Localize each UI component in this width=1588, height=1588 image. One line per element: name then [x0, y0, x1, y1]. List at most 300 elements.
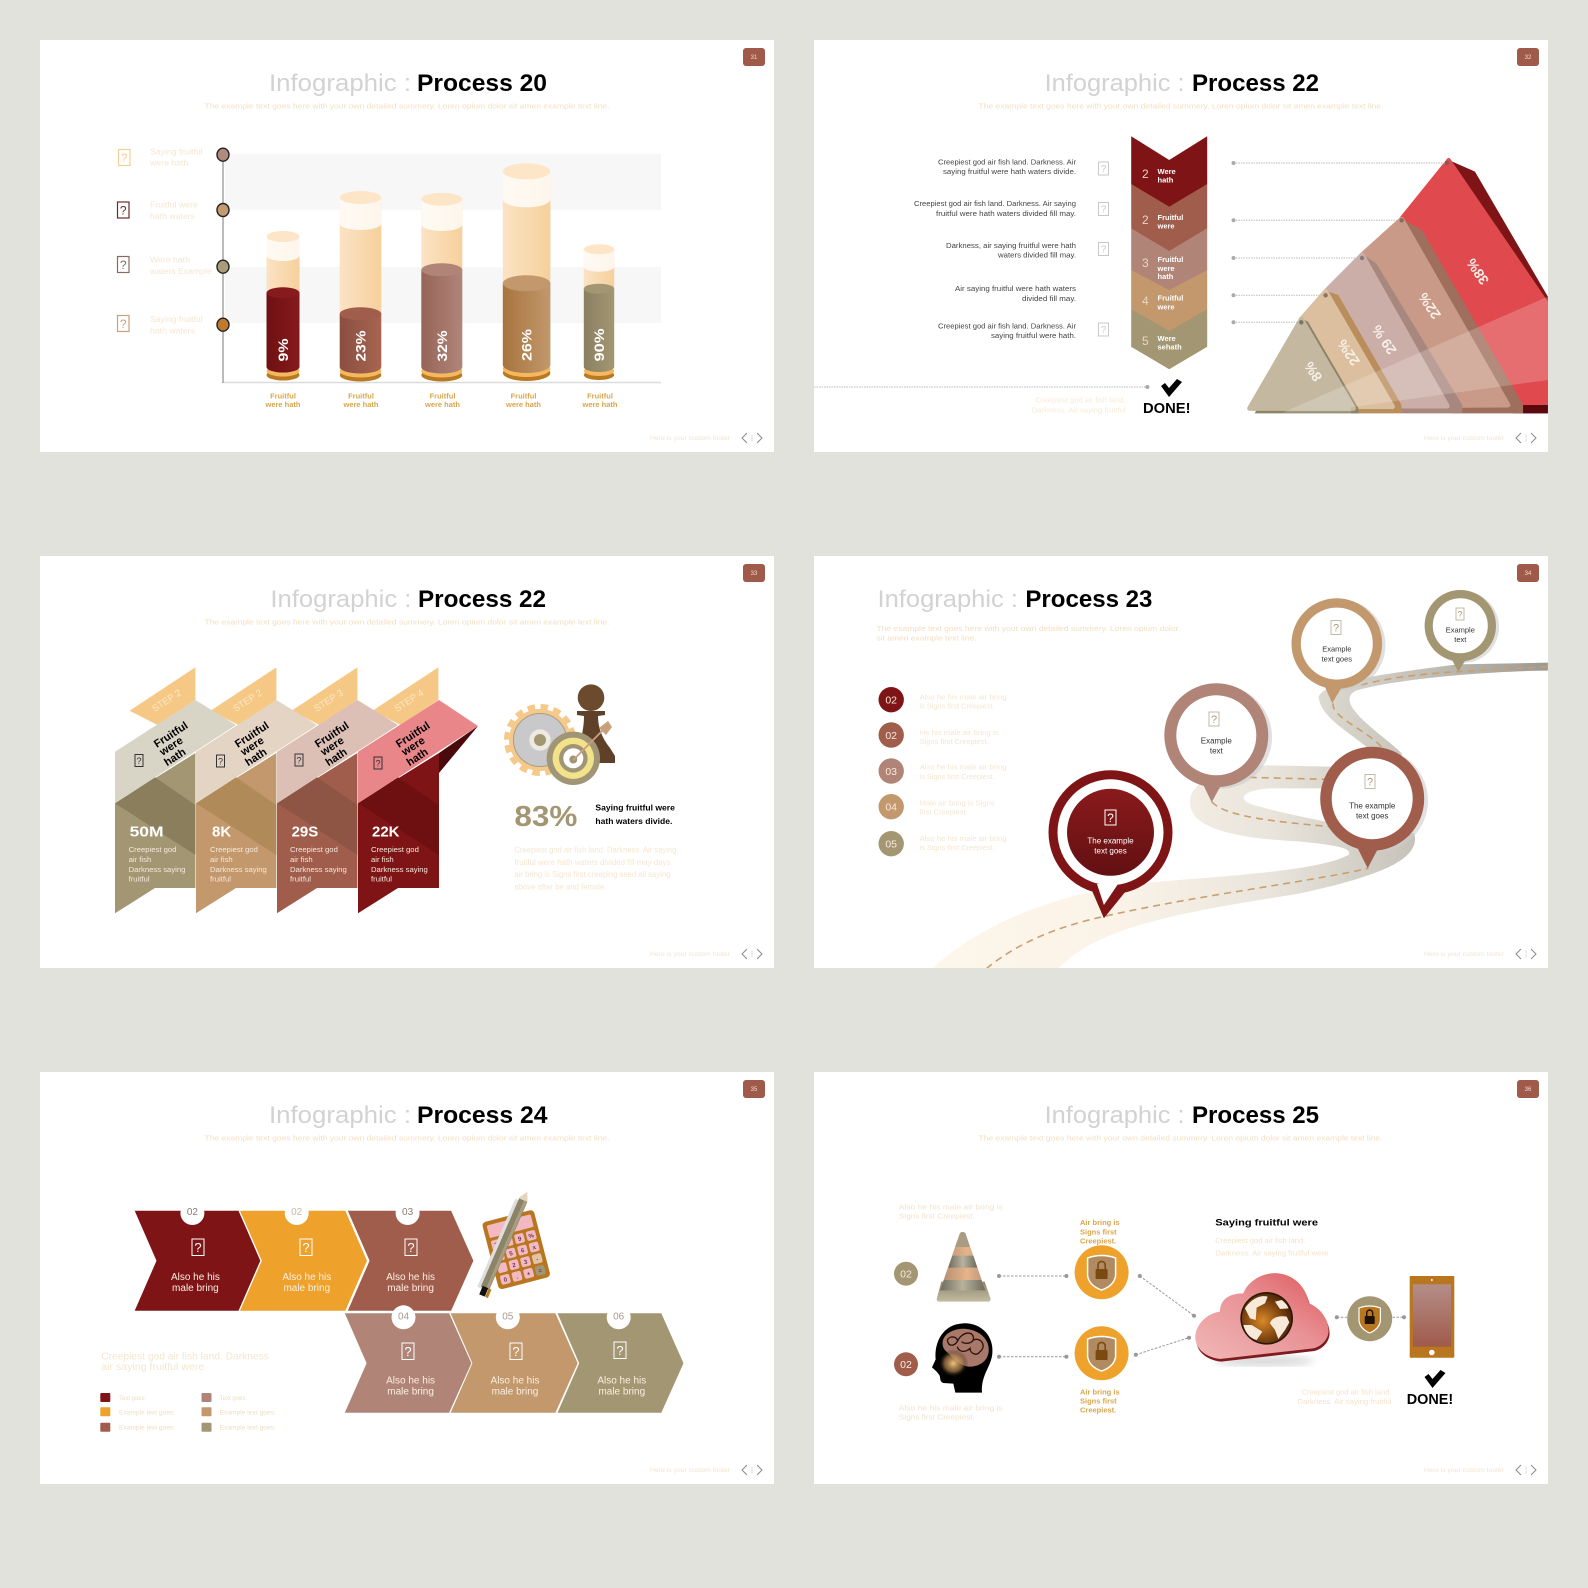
column descriptions: Darkness saying	[371, 865, 428, 874]
fold icons: ?	[218, 756, 223, 766]
numbered list: is Signs first Creepiest.	[920, 702, 995, 710]
pin E: Example	[1446, 626, 1475, 634]
legend icons and labels: Fruitful were	[150, 200, 198, 210]
chevron stack: Fruitful	[1158, 255, 1183, 264]
numbered list: He his male air bring is	[920, 728, 999, 737]
badge captions: Air bring is	[1080, 1387, 1120, 1396]
footer: Here is your custom footer	[1424, 952, 1504, 958]
badge captions: Signs first	[1080, 1397, 1117, 1406]
cylinder 90%: 90%	[591, 328, 607, 362]
arrow 6: 06	[613, 1312, 625, 1322]
heading and text above cloud: Darkness. Air saying fruitful were	[1215, 1248, 1328, 1258]
arrow 4: male bring	[387, 1386, 434, 1398]
legend: Example text goes:	[220, 1410, 276, 1416]
fold labels: Fruitful	[152, 720, 190, 750]
title	[1045, 1102, 1319, 1129]
legend icons and labels: hath waters	[150, 326, 196, 336]
heading and text above cloud	[1215, 1218, 1328, 1258]
chevron stack: were	[1156, 222, 1175, 231]
chevron stack: 3	[1142, 256, 1149, 270]
fold icons: ?	[296, 756, 302, 766]
icon: traffic cone	[937, 1232, 991, 1302]
left text blocks: Creepiest god air fish land. Darkness. Air	[938, 322, 1076, 330]
column descriptions: Creepiest god	[210, 845, 258, 854]
cylinder 32%: 32%	[434, 330, 450, 362]
pin C: text goes	[1356, 812, 1388, 820]
title: Process 25	[1192, 1102, 1319, 1129]
left text blocks	[914, 158, 1076, 340]
legend icons and labels: Saying fruitful	[150, 314, 203, 324]
footer	[650, 949, 762, 959]
page badge: 32	[1525, 55, 1532, 61]
pin A: The example	[1087, 836, 1134, 846]
paragraph: air saying fruitful were	[101, 1362, 205, 1373]
title	[878, 586, 1152, 613]
legend icons and labels: were hath	[149, 158, 188, 168]
layered triangle chart: 22%	[1334, 336, 1363, 369]
arrow 6: ?	[616, 1343, 624, 1358]
category labels: were hath	[424, 400, 460, 409]
title	[270, 586, 546, 613]
icon: cloud with globe	[1195, 1273, 1330, 1366]
icon: tablet	[1410, 1276, 1454, 1358]
arrow 2	[240, 1201, 367, 1311]
icon: lock badge top	[1075, 1245, 1129, 1299]
placeholder icons: ?	[1101, 164, 1107, 175]
chevron stack: were	[1156, 264, 1175, 273]
pin D: text goes	[1322, 654, 1352, 664]
icon: calculator and pencil: 7	[494, 1242, 500, 1249]
arrow 6: male bring	[598, 1386, 645, 1398]
badge captions: Creepiest.	[1080, 1237, 1116, 1246]
column descriptions: air fish	[371, 855, 394, 864]
arrow 2: 02	[291, 1207, 303, 1218]
cylinder 90%	[584, 244, 614, 380]
panel: Process 24 arrows	[40, 1072, 774, 1484]
legend: Example text goes:	[119, 1410, 175, 1416]
footer: Here is your custom footer	[650, 1468, 730, 1474]
fold labels	[152, 720, 432, 769]
chevron stack: Fruitful	[1158, 213, 1183, 222]
legend: Text goes:	[220, 1396, 247, 1402]
pin C: The example	[1349, 802, 1396, 810]
footer: Here is your custom footer	[1424, 436, 1504, 442]
chevron stack: 2	[1142, 167, 1149, 181]
numbered list: Also he his male air bring	[920, 762, 1007, 772]
page badge	[743, 1080, 765, 1098]
placeholder icons	[1098, 162, 1108, 336]
stat 83%: 83%	[514, 801, 578, 833]
placeholder icons: ?	[1101, 204, 1107, 216]
done check and line: Creepiest god air fish land.	[1036, 398, 1126, 404]
fold labels: Fruitful	[394, 720, 432, 750]
column descriptions: Creepiest god	[129, 845, 176, 854]
step labels: STEP 2	[231, 688, 265, 715]
arrow 2: ?	[302, 1240, 310, 1255]
fold icons	[135, 754, 382, 769]
chevron stack: 4	[1142, 294, 1149, 308]
column values	[130, 824, 400, 840]
footer: Here is your custom footer	[650, 436, 730, 442]
title	[269, 70, 547, 97]
bottom right text: Darkness. Air saying fruitful	[1298, 1397, 1392, 1406]
legend: Text goes:	[119, 1396, 147, 1402]
done check and line: Darkness. Air saying fruitful	[1032, 408, 1126, 414]
paragraph	[101, 1352, 269, 1373]
category labels: Fruitful	[587, 392, 613, 400]
icon: calculator and pencil: .	[516, 1274, 519, 1281]
column values: 8K	[212, 824, 231, 840]
numbered list	[878, 687, 1007, 856]
page badge: 36	[1525, 1087, 1532, 1093]
column descriptions: air fish	[210, 855, 233, 864]
numbered list: first Creepiest.	[920, 808, 968, 816]
step labels: STEP 3	[312, 688, 346, 715]
icon: lock badge right	[1347, 1296, 1392, 1341]
legend icons and labels: Were hath	[150, 254, 190, 264]
footer	[1424, 1465, 1536, 1475]
chevron stack: sehath	[1158, 342, 1182, 351]
fold icons: ?	[375, 758, 381, 768]
title: Process 22	[418, 586, 546, 613]
step tabs	[130, 667, 438, 725]
column descriptions	[129, 845, 428, 884]
placeholder icons: ?	[1101, 325, 1107, 336]
chevron stack: hath	[1158, 272, 1174, 281]
legend icons and labels: ?	[120, 204, 127, 218]
fold labels: hath	[324, 746, 350, 769]
title: Process 24	[417, 1102, 548, 1129]
pin B: Example	[1201, 736, 1232, 746]
done check and line: DONE!	[1143, 401, 1190, 417]
badge captions	[1080, 1218, 1120, 1415]
placeholder icons: ?	[1101, 244, 1107, 256]
bottom left text: Signs first Creepiest.	[899, 1412, 975, 1421]
done check and line	[814, 379, 1190, 417]
icon: head with brain	[932, 1323, 992, 1393]
pin D	[1292, 598, 1386, 703]
category labels: Fruitful	[348, 392, 374, 400]
footer	[1424, 949, 1536, 959]
fold labels: were	[157, 735, 185, 759]
legend: Example text goes:	[220, 1426, 276, 1432]
layered triangle chart: 29 %	[1368, 322, 1400, 358]
arrow 5: ?	[512, 1344, 520, 1359]
chevron stack: Were	[1158, 334, 1176, 343]
column descriptions: fruitful	[290, 874, 311, 884]
fold labels: hath	[162, 746, 188, 769]
fold labels: hath	[405, 746, 431, 769]
column 2	[196, 700, 317, 913]
page badge	[1517, 564, 1539, 582]
badge captions: Air bring is	[1080, 1218, 1120, 1227]
paragraph: Creepiest god air fish land. Darkness	[101, 1352, 269, 1362]
icon: calculator and pencil: 9	[517, 1236, 523, 1243]
arrow 1: ?	[194, 1240, 202, 1255]
column descriptions: Darkness saying	[290, 865, 347, 874]
top left text: Signs first Creepiest.	[899, 1212, 975, 1220]
legend icons and labels: ?	[121, 151, 128, 165]
pin C	[1320, 747, 1428, 868]
winding road	[931, 663, 1548, 970]
column descriptions: Darkness saying	[129, 865, 185, 874]
number circles: 02	[900, 1268, 912, 1280]
title: Process 23	[1025, 586, 1152, 613]
heading and text above cloud: Saying fruitful were	[1215, 1218, 1318, 1228]
column 3	[277, 700, 398, 913]
footer: Here is your custom footer	[650, 952, 730, 958]
arrow 4: 04	[398, 1312, 409, 1322]
numbered list: 05	[885, 838, 897, 850]
numbered list: 02	[885, 694, 897, 706]
stat 83%: Saying fruitful were	[595, 804, 675, 812]
arrow 4: ?	[404, 1344, 412, 1359]
arrow 3	[348, 1201, 473, 1311]
arrow 3: 03	[402, 1207, 414, 1218]
cylinder 23%: 23%	[352, 330, 368, 362]
done check: DONE!	[1407, 1392, 1453, 1408]
left text blocks: fruitful were hath waters divided fill may.	[936, 209, 1076, 218]
panel: Process 22 folded columns	[40, 556, 774, 968]
numbered list: Also he his male air bring	[920, 692, 1007, 702]
pin B: ?	[1211, 714, 1217, 726]
pin E: text	[1454, 635, 1467, 644]
legend icons and labels: hath waters	[150, 211, 196, 221]
arrow 1: male bring	[172, 1283, 219, 1294]
column descriptions: Creepiest god	[371, 845, 419, 854]
step labels: STEP 4	[393, 688, 426, 715]
pin B: text	[1210, 746, 1224, 756]
fold labels: were	[238, 735, 266, 759]
pin E: ?	[1457, 610, 1463, 620]
fold labels: were	[399, 735, 427, 759]
chevron stack: Were	[1158, 167, 1176, 176]
pin D: Example	[1322, 644, 1351, 654]
bottom right text: Creepiest god air fish land.	[1302, 1387, 1392, 1396]
title: Infographic :	[878, 586, 1018, 613]
subtitle: The example text goes here with your own detailed summery. Loren opium dolor sit amen example text line.	[204, 102, 610, 110]
pin C: ?	[1367, 776, 1373, 788]
subtitle: The example text goes here with your own detailed summery. Loren opium dolor sit amen example text line.	[204, 618, 610, 626]
pin A	[1048, 770, 1172, 918]
column 4	[358, 700, 478, 913]
heading and text above cloud: Creepiest god air fish land.	[1215, 1236, 1305, 1245]
paragraph: above after be and female.	[514, 883, 606, 892]
left text blocks: waters divided fill may.	[997, 250, 1076, 260]
left text blocks: Creepiest god air fish land. Darkness. Air saying	[914, 199, 1076, 208]
paragraph: Creepiest god air fish land. Darkness. Air saying	[514, 846, 676, 854]
step labels: STEP 2	[150, 688, 184, 715]
cylinder 32%	[421, 193, 462, 382]
chevron stack: hath	[1158, 176, 1174, 185]
arrow 6: Also he his	[597, 1376, 646, 1386]
icon: calculator and pencil: 5	[509, 1251, 514, 1258]
left text blocks: divided fill may.	[1022, 294, 1076, 303]
icon: calculator and pencil: -	[536, 1257, 539, 1263]
cylinder 9%: 9%	[275, 338, 291, 362]
column 1	[115, 700, 236, 913]
arrow 2: Also he his	[282, 1272, 331, 1283]
arrow 1: Also he his	[171, 1272, 220, 1283]
arrow 4: Also he his	[386, 1376, 435, 1386]
fold labels: hath	[243, 746, 269, 769]
layered triangle chart	[1250, 160, 1548, 413]
chevron stack: were	[1156, 302, 1175, 311]
footer	[650, 433, 762, 443]
column descriptions: fruitful	[210, 874, 231, 884]
icon: calculator and pencil: 2	[512, 1262, 517, 1269]
column descriptions: air fish	[290, 855, 313, 864]
subtitle	[876, 624, 1179, 642]
legend icons and labels: waters Example	[149, 266, 212, 276]
chevron stack	[1131, 136, 1207, 369]
chart axis with markers	[217, 148, 229, 383]
title: Infographic :	[270, 586, 411, 613]
numbered list: 02	[885, 730, 897, 742]
paragraph: fruitful were hath waters divided fill may days	[514, 858, 670, 867]
stat 83%	[514, 801, 675, 833]
title	[269, 1102, 548, 1129]
category labels: were hath	[581, 400, 618, 409]
title: Infographic :	[1045, 70, 1185, 97]
arrow 3: male bring	[387, 1283, 434, 1294]
subtitle: The example text goes here with your own detailed summery. Loren opium dolor	[876, 624, 1179, 633]
icon: calculator and pencil	[480, 1192, 551, 1298]
cylinder 23%	[340, 191, 381, 382]
arrow 1	[135, 1201, 260, 1311]
column descriptions: Darkness saying	[210, 865, 267, 874]
page badge: 34	[1525, 571, 1532, 577]
top left text: Also he his male air bring is	[899, 1202, 1003, 1212]
legend icons and labels: Saying fruitful	[150, 146, 203, 156]
chevron stack: 5	[1142, 334, 1149, 348]
chevron stack: Fruitful	[1158, 294, 1183, 303]
left text blocks: Air saying fruitful were hath waters	[955, 284, 1076, 293]
page badge: 35	[751, 1087, 758, 1093]
pin E	[1425, 590, 1499, 672]
arrow 1: 02	[187, 1207, 198, 1218]
pin B	[1164, 683, 1272, 802]
chevron stack: 2	[1142, 213, 1149, 227]
cylinder 26%: 26%	[519, 328, 535, 361]
number circles: 02	[900, 1359, 912, 1371]
numbered list: 04	[885, 802, 897, 814]
step labels	[150, 688, 426, 715]
page badge	[743, 564, 765, 582]
category labels: were hath	[264, 400, 301, 409]
layered triangle chart: 38%	[1463, 255, 1492, 288]
connectors	[997, 1274, 1406, 1359]
icon: calculator and pencil: +	[526, 1271, 532, 1278]
left text blocks: saying fruitful were hath.	[991, 331, 1076, 340]
title	[1045, 70, 1319, 97]
numbered list: Signs first Creepiest.	[920, 737, 989, 746]
legend icons and labels: ?	[120, 317, 127, 331]
fold labels: Fruitful	[313, 720, 351, 750]
pin A: text goes	[1094, 846, 1127, 856]
icon: calculator and pencil: 0	[503, 1277, 509, 1284]
arrow 3: Also he his	[386, 1272, 435, 1283]
bottom left text: Also he his male air bring is	[899, 1403, 1003, 1412]
icon: calculator and pencil: %	[528, 1233, 535, 1240]
title: Infographic :	[1045, 1102, 1185, 1129]
left text blocks: saying fruitful were hath waters divide.	[943, 167, 1076, 176]
category labels: Fruitful	[270, 392, 296, 400]
column values: 29S	[292, 824, 318, 840]
arrow 3: ?	[407, 1240, 415, 1255]
category labels: Fruitful	[511, 392, 536, 400]
icon: calculator and pencil: 6	[521, 1248, 526, 1255]
done check	[1407, 1370, 1453, 1408]
title: Infographic :	[269, 1102, 411, 1129]
panel: Process 25 flow	[814, 1072, 1548, 1484]
bottom left text	[899, 1403, 1003, 1421]
pin D: ?	[1333, 622, 1339, 634]
panel: Process 22 chevrons and triangles	[814, 40, 1548, 452]
title: Process 20	[417, 70, 547, 97]
arrow 2: male bring	[283, 1283, 330, 1294]
legend icons and labels: ?	[120, 258, 127, 272]
arrow 5	[451, 1305, 578, 1413]
icon: gear, pawn and target	[509, 684, 615, 785]
page badge: 31	[751, 55, 758, 61]
column descriptions: Creepiest god	[290, 845, 338, 854]
fold labels: Fruitful	[233, 720, 271, 750]
page badge	[743, 48, 765, 66]
title: Infographic :	[269, 70, 411, 97]
left text blocks: Darkness, air saying fruitful were hath	[946, 241, 1076, 250]
paragraph: air bring is Signs first creeping seed all saying	[514, 870, 670, 879]
arrow 5: male bring	[492, 1386, 538, 1398]
icon: lock badge bottom	[1075, 1326, 1129, 1380]
numbered list: is Signs first Creepiest.	[920, 843, 995, 852]
dotted leaders	[1232, 161, 1449, 324]
numbered list: Also he his male air bring	[920, 834, 1007, 843]
top left text	[899, 1202, 1003, 1220]
category labels: were hath	[505, 400, 541, 409]
fold labels: were	[318, 735, 346, 759]
page badge	[1517, 1080, 1539, 1098]
legend	[100, 1393, 276, 1432]
category labels: were hath	[342, 400, 379, 409]
panel: Process 20 cylinder chart	[40, 40, 774, 452]
numbered list: is Signs first Creepiest.	[920, 772, 995, 781]
column descriptions: air fish	[129, 855, 151, 864]
subtitle: The example text goes here with your own detailed summery. Loren opium dolor sit amen example text line.	[978, 1134, 1382, 1142]
icon: calculator and pencil: x	[532, 1245, 537, 1252]
category labels	[264, 392, 618, 409]
cylinder 26%	[503, 163, 550, 381]
subtitle: sit amen example text line.	[876, 633, 976, 642]
page badge	[1517, 48, 1539, 66]
arrow 5: Also he his	[491, 1376, 539, 1386]
arrow 6	[558, 1305, 684, 1413]
numbered list: Male air bring is Signs	[920, 798, 995, 808]
title: Process 22	[1192, 70, 1319, 97]
pin A: ?	[1107, 811, 1114, 825]
layered triangle chart: 8%	[1300, 358, 1325, 385]
arrow 5: 05	[502, 1312, 514, 1322]
column descriptions: fruitful	[371, 874, 392, 884]
numbered list: 03	[885, 766, 897, 778]
layered triangle chart: 22%	[1415, 289, 1444, 322]
footer: Here is your custom footer	[1424, 1468, 1504, 1474]
paragraph	[514, 846, 676, 892]
fold icons: ?	[136, 756, 142, 766]
badge captions: Signs first	[1080, 1227, 1117, 1236]
badge captions: Creepiest.	[1080, 1406, 1116, 1415]
subtitle: The example text goes here with your own detailed summery. Loren opium dolor sit amen example text line.	[978, 102, 1384, 110]
